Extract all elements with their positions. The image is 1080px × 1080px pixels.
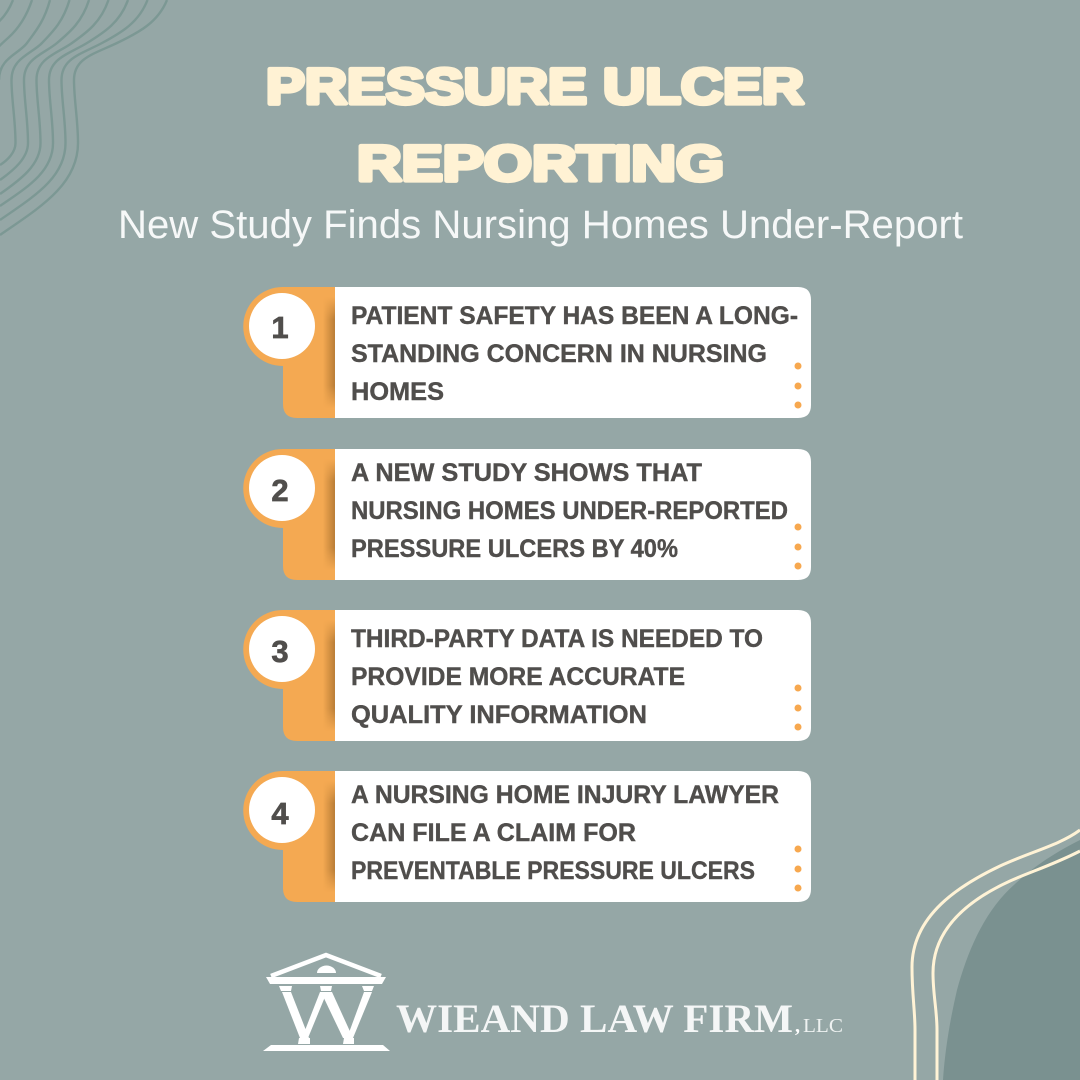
item 1 text: STANDING CONCERN IN NURSING <box>351 340 767 368</box>
panel: item 1 <box>243 287 811 418</box>
tab shadow 4 <box>324 784 335 889</box>
orange tab 1 <box>243 287 335 418</box>
number badge 4 <box>249 777 315 843</box>
dots 3 <box>794 684 802 730</box>
decoration: top-left wavy lines <box>0 0 167 235</box>
item 4 text: A NURSING HOME INJURY LAWYER <box>351 781 779 809</box>
number badge 1: 1 <box>271 310 289 345</box>
tab shadow 3 <box>324 623 335 728</box>
item 4 text: CAN FILE A CLAIM FOR <box>351 819 636 847</box>
logo: firm name: WIEAND LAW FIRM <box>396 996 793 1041</box>
text card 4 <box>335 771 811 902</box>
tab shadow 1 <box>324 300 335 405</box>
item 1 text: PATIENT SAFETY HAS BEEN A LONG- <box>351 302 798 330</box>
orange tab 3 <box>243 610 335 741</box>
title <box>266 58 804 192</box>
item 4 text <box>351 781 779 885</box>
dots 4 <box>794 846 802 892</box>
item 1 text <box>351 302 798 406</box>
number badge 3 <box>249 616 315 682</box>
panel: item 3 <box>243 610 811 741</box>
dots 2 <box>794 524 802 570</box>
panel: item 2 <box>243 449 811 580</box>
panel: item 4 <box>243 771 811 902</box>
title: PRESSURE ULCER <box>266 58 804 114</box>
logo: courthouse W icon <box>263 955 390 1051</box>
logo: firm name: LLC <box>803 1015 843 1037</box>
item 2 text <box>351 459 788 563</box>
dots 1 <box>794 362 802 408</box>
title: REPORTING <box>357 136 724 192</box>
item 3 text: PROVIDE MORE ACCURATE <box>351 663 685 691</box>
number badge 4: 4 <box>271 796 289 831</box>
number badge 1 <box>249 293 315 359</box>
item 4 text: PREVENTABLE PRESSURE ULCERS <box>351 857 755 885</box>
logo: firm name: , <box>795 1015 800 1037</box>
text card 2 <box>335 449 811 580</box>
number badge 2 <box>249 455 315 521</box>
number badge 3: 3 <box>271 634 289 669</box>
tab shadow 2 <box>324 462 335 567</box>
item 3 text: THIRD-PARTY DATA IS NEEDED TO <box>351 625 763 653</box>
orange tab 4 <box>243 771 335 902</box>
item 3 text <box>351 625 763 729</box>
text card 3 <box>335 610 811 741</box>
item 1 text: HOMES <box>351 378 444 406</box>
item 3 text: QUALITY INFORMATION <box>351 701 647 729</box>
item 2 text: A NEW STUDY SHOWS THAT <box>351 459 702 487</box>
decoration: bottom-right shape and cream lines <box>912 830 1080 1080</box>
number badge 2: 2 <box>271 473 289 508</box>
text card 1 <box>335 287 811 418</box>
orange tab 2 <box>243 449 335 580</box>
subtitle: New Study Finds Nursing Homes Under-Report <box>118 203 963 247</box>
item 2 text: NURSING HOMES UNDER-REPORTED <box>351 497 788 525</box>
item 2 text: PRESSURE ULCERS BY 40% <box>351 535 678 563</box>
